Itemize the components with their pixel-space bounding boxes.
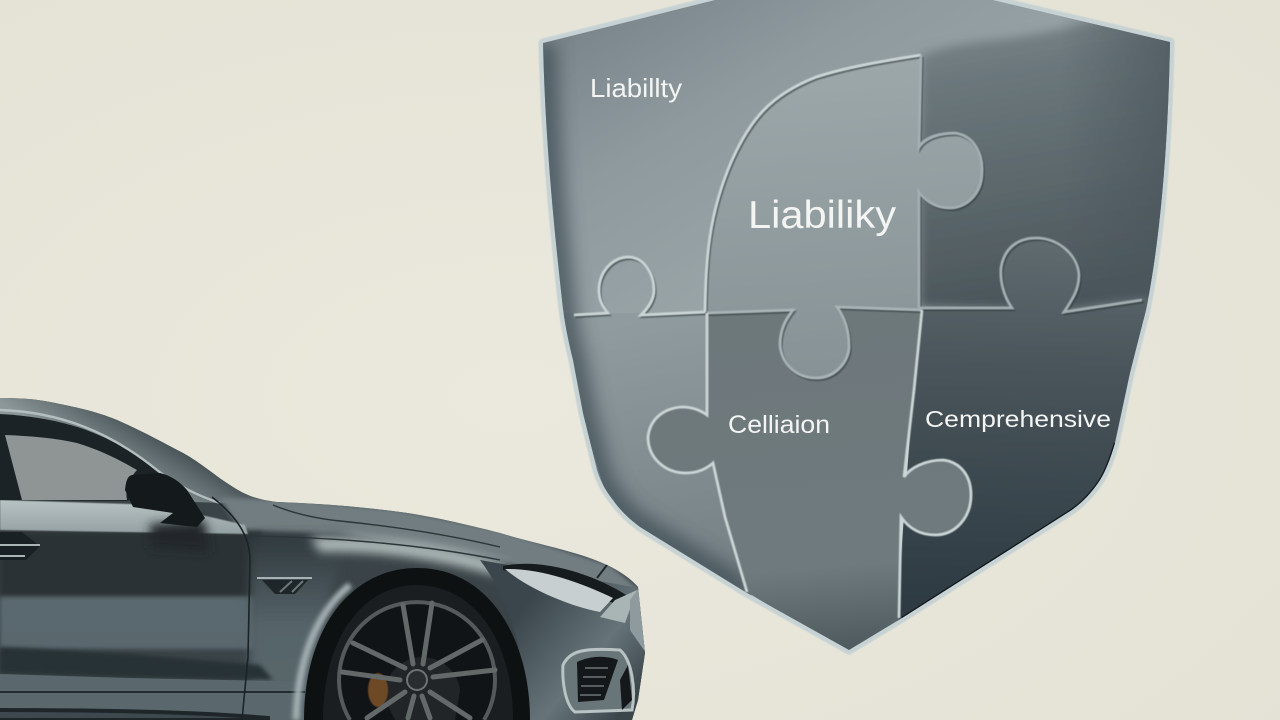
wheel hub <box>407 670 427 690</box>
fender vent <box>257 578 312 594</box>
car <box>0 396 650 720</box>
car bodywork clipped to silhouette <box>0 396 650 720</box>
door handle <box>0 532 40 560</box>
bumper lower vent <box>563 649 634 712</box>
shield with puzzle pieces <box>530 0 1190 655</box>
puzzle piece: lower left <box>564 314 752 596</box>
front edge strip <box>630 588 646 653</box>
side mirror <box>125 473 205 527</box>
chrome roof trim <box>0 410 220 503</box>
fender panel <box>246 529 344 681</box>
body base <box>0 396 650 720</box>
wheel rim <box>339 602 495 720</box>
bonnet highlight <box>310 537 510 575</box>
bonnet crease lines <box>250 505 500 560</box>
puzzle piece: upper left <box>530 0 1190 330</box>
label: centre liability: Liabiliky <box>748 194 897 237</box>
side window glass <box>5 435 137 500</box>
seam shadows <box>576 57 1144 380</box>
sill panels <box>0 674 310 720</box>
window frame <box>0 414 160 501</box>
lower door light band <box>0 597 255 649</box>
headlight lens <box>505 569 613 612</box>
puzzle piece: lower right with tab <box>896 241 1148 622</box>
puzzle pieces clipped to shield <box>530 0 1190 655</box>
shield rim <box>543 0 1170 650</box>
mirror shadow on door <box>150 520 210 552</box>
roof and pillar band <box>0 396 285 506</box>
puzzle piece: centre collision <box>648 307 971 655</box>
puzzle piece: upper right <box>920 21 1170 310</box>
sill line <box>0 691 305 693</box>
front corner panel <box>600 590 637 623</box>
upper door dark band <box>0 532 262 596</box>
seam highlights <box>574 55 1142 618</box>
headlight dark surround <box>503 564 628 604</box>
door shut line <box>212 497 250 720</box>
lower sill dark line <box>0 710 268 720</box>
brake disc <box>385 657 460 720</box>
wheel spokes <box>342 603 495 718</box>
shading: left inner edge <box>543 43 747 593</box>
wheel arch highlight <box>296 585 350 720</box>
wheel arch <box>304 568 530 720</box>
shading: top right edge <box>1080 21 1170 320</box>
nose panel <box>480 560 650 720</box>
tyre <box>323 585 513 720</box>
label: collision: Celliaion <box>728 411 830 439</box>
lower right dark edge <box>902 443 1115 618</box>
belt line highlight <box>0 500 248 534</box>
label: comprehensive: Cemprehensive <box>925 406 1111 432</box>
puzzle piece: centre liability <box>705 55 982 378</box>
bonnet shut line <box>597 565 607 578</box>
brake caliper <box>368 673 388 707</box>
door dark stripe <box>0 647 273 680</box>
bonnet top surface <box>221 497 638 588</box>
label: top left liability: Liabillty <box>590 73 682 103</box>
